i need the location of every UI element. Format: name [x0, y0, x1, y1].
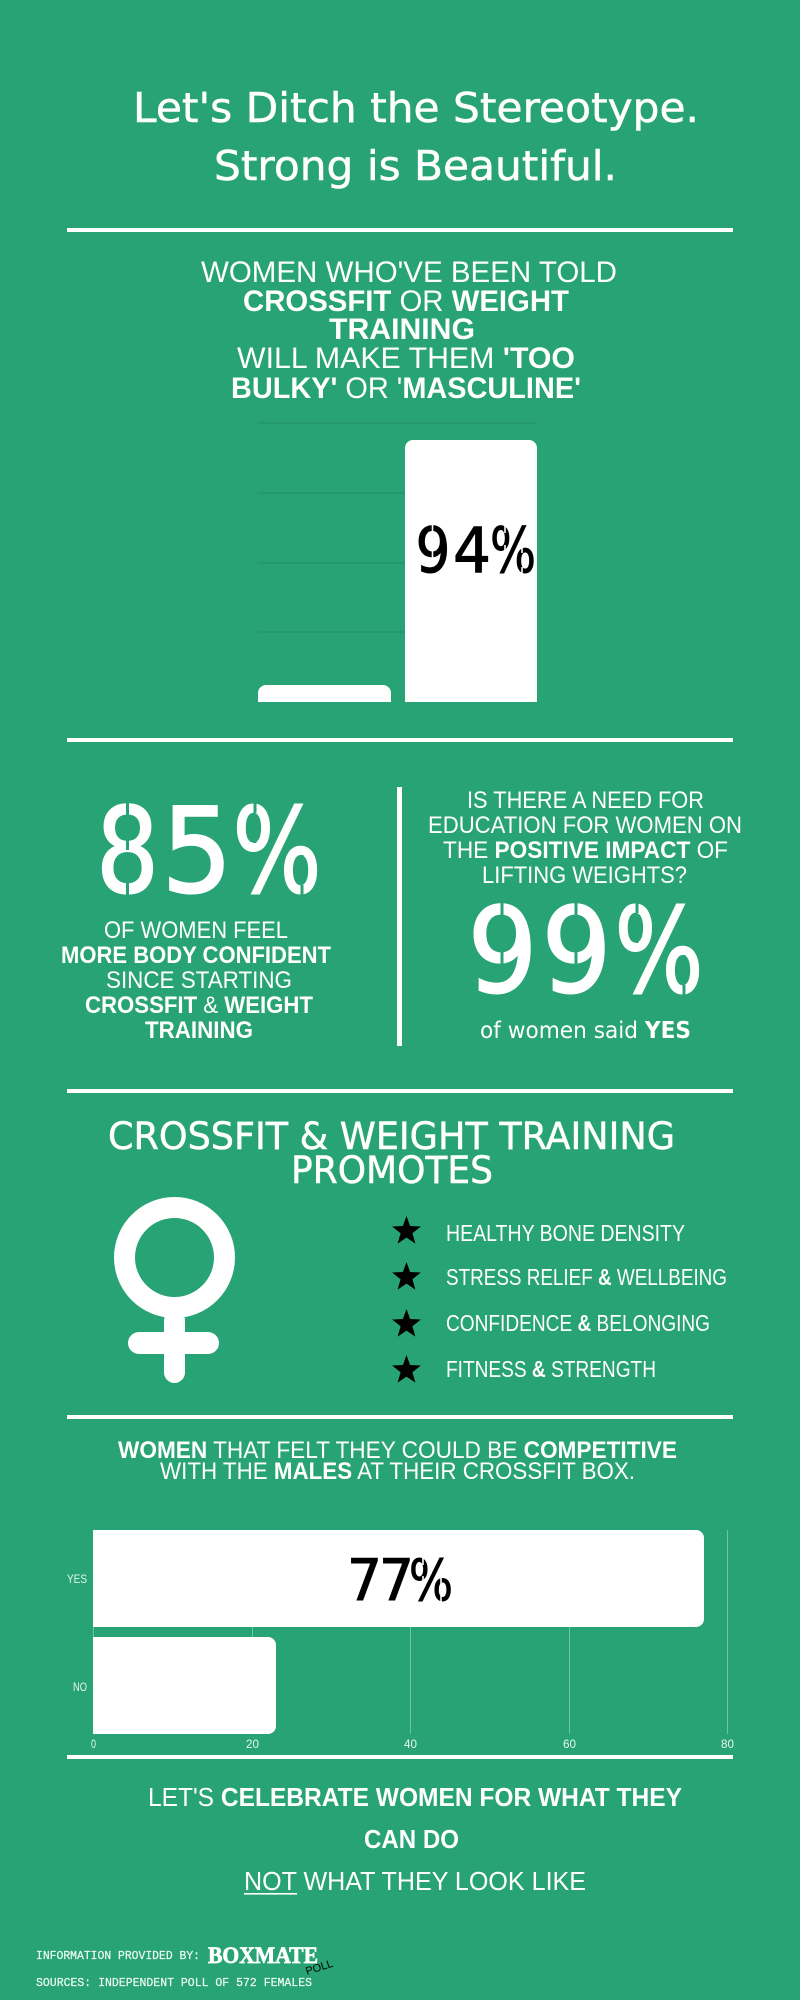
bar: yes — [405, 440, 537, 702]
title — [133, 84, 699, 190]
bar: yes — [93, 1530, 704, 1627]
stat: 85% — [96, 782, 322, 920]
axis labels: 40 — [404, 1737, 417, 1751]
value: 77%: 7 — [347, 1548, 382, 1614]
heading: women who have been told: WILL MAKE THEM 'TOO — [237, 342, 575, 375]
axis labels: 20 — [246, 1737, 259, 1751]
panel: promotes — [108, 1115, 727, 1383]
question text: LIFTING WEIGHTS? — [482, 862, 687, 889]
stat: 85%: % — [232, 782, 322, 920]
heading: crossfit promotes: PROMOTES — [291, 1149, 493, 1192]
stat: 85%: 5 — [162, 782, 232, 920]
item: healthy bone density: HEALTHY BONE DENSITY — [446, 1220, 685, 1246]
icon: star — [392, 1309, 421, 1337]
text: body confident — [61, 917, 331, 1044]
value: 94%: % — [490, 514, 536, 587]
heading: women who have been told: TRAINING — [329, 313, 475, 346]
text: body confident: MORE BODY CONFIDENT — [61, 942, 331, 969]
item: confidence: CONFIDENCE & BELONGING — [446, 1310, 710, 1336]
axis labels: 60 — [563, 1737, 576, 1751]
stat: 99%: % — [614, 882, 704, 1020]
axis labels: YES — [67, 1572, 87, 1586]
heading: competitive: WITH THE MALES AT THEIR CROSSFIT BOX. — [160, 1458, 635, 1485]
column chart: 94 percent — [258, 423, 537, 702]
panel: 85 percent body confident — [61, 782, 331, 1044]
title: Let's Ditch the Stereotype. — [133, 84, 699, 132]
stat: 85%: 8 — [96, 782, 159, 920]
value: 77%: % — [409, 1548, 453, 1614]
question text: EDUCATION FOR WOMEN ON — [428, 812, 742, 839]
text: information provided by: INFORMATION PROVIDED BY: — [36, 1949, 200, 1963]
heading: crossfit promotes: CROSSFIT & WEIGHT TRAINING — [108, 1115, 675, 1158]
value: 77%: 7 — [379, 1548, 414, 1614]
axis labels: NO — [73, 1680, 87, 1694]
benefit list — [392, 1216, 727, 1383]
bar: no — [258, 685, 391, 702]
bar: no — [93, 1637, 276, 1734]
question text: IS THERE A NEED FOR — [467, 787, 704, 814]
icon: star — [392, 1262, 421, 1290]
heading: women who have been told — [201, 256, 617, 405]
text: body confident: OF WOMEN FEEL — [104, 917, 288, 944]
value: 94%: 9 — [416, 514, 450, 587]
item: stress relief: STRESS RELIEF & WELLBEING — [446, 1264, 727, 1290]
title: Strong is Beautiful. — [214, 142, 617, 190]
axis labels: 0 — [91, 1737, 96, 1751]
closing message — [148, 1782, 682, 1896]
closing message: LET'S CELEBRATE WOMEN FOR WHAT THEY — [148, 1782, 682, 1812]
axis labels — [67, 1572, 734, 1751]
logo: boxmate: BOXMATE — [208, 1943, 318, 1968]
text: body confident: TRAINING — [145, 1017, 253, 1044]
value: 94%: 4 — [453, 514, 491, 587]
logo tag: poll: POLL — [304, 1958, 335, 1978]
heading: crossfit promotes — [108, 1115, 675, 1192]
text: of women said yes: of women said YES — [480, 1018, 691, 1044]
question text — [428, 787, 742, 889]
panel: competitive with males — [67, 1437, 734, 1751]
item: fitness: FITNESS & STRENGTH — [446, 1356, 656, 1382]
panel: told too bulky — [201, 256, 617, 702]
heading: competitive: WOMEN THAT FELT THEY COULD BE COMPETITIVE — [118, 1437, 677, 1464]
icon: female symbol — [124, 1208, 224, 1383]
axis labels: 80 — [721, 1737, 734, 1751]
icon: star — [392, 1355, 421, 1383]
bar chart: yes no — [67, 1530, 734, 1751]
icon: star — [392, 1216, 421, 1244]
heading: competitive — [118, 1437, 677, 1485]
heading: women who have been told: BULKY' OR 'MASCULINE' — [231, 372, 581, 405]
panel: 99 percent need for education — [428, 787, 742, 1044]
text: body confident: CROSSFIT & WEIGHT — [85, 992, 313, 1019]
closing message: NOT WHAT THEY LOOK LIKE — [244, 1866, 586, 1896]
closing message: CAN DO — [364, 1824, 459, 1854]
stat: 99% — [468, 882, 704, 1020]
question text: THE POSITIVE IMPACT OF — [443, 837, 728, 864]
text: body confident: SINCE STARTING — [106, 967, 292, 994]
value: 77% — [347, 1548, 453, 1614]
value: 94% — [416, 514, 536, 587]
heading: women who have been told: WOMEN WHO'VE BEEN TOLD — [201, 256, 617, 289]
stat: 99%: 9 — [542, 882, 612, 1020]
stat: 99%: 9 — [468, 882, 538, 1020]
heading: women who have been told: CROSSFIT OR WEIGHT — [243, 285, 569, 318]
footer credits — [36, 1943, 335, 1990]
text: sources: SOURCES: INDEPENDENT POLL OF 572 FEMALES — [36, 1976, 312, 1990]
